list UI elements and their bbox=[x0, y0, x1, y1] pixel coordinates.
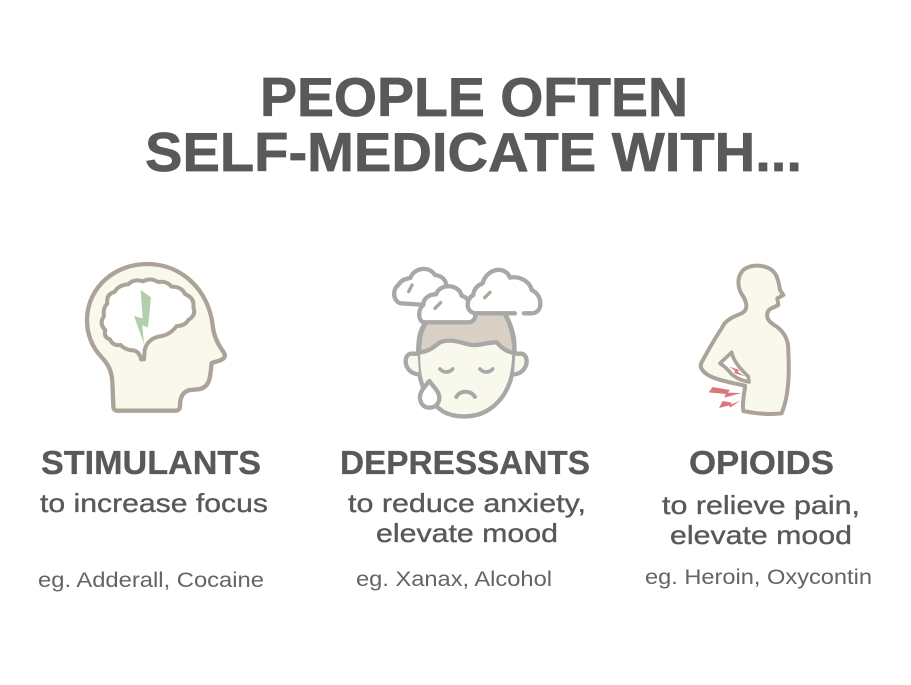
icon: sad face with clouds bbox=[394, 269, 540, 416]
title: SELF-MEDICATE WITH... bbox=[145, 121, 802, 183]
cloud middle bbox=[419, 286, 475, 322]
hair bbox=[419, 312, 515, 353]
depressants text block: DEPRESSANTS bbox=[340, 444, 590, 481]
stimulants text block: to increase focus bbox=[40, 488, 268, 518]
cloud left bbox=[394, 269, 447, 305]
opioids text block bbox=[645, 444, 872, 589]
opioids text block: eg. Heroin, Oxycontin bbox=[645, 565, 872, 589]
stimulants text block bbox=[38, 444, 268, 592]
title: PEOPLE OFTEN bbox=[260, 66, 688, 128]
tear bbox=[420, 381, 439, 408]
pain bolt upper bbox=[709, 387, 742, 398]
stimulants text block: STIMULANTS bbox=[41, 444, 261, 481]
depressants text block bbox=[340, 444, 590, 591]
pain bolt lower bbox=[719, 400, 741, 408]
cloud right bbox=[468, 270, 540, 313]
depressants text block: elevate mood bbox=[376, 518, 558, 548]
opioids text block: to relieve pain, bbox=[662, 490, 860, 520]
frown bbox=[456, 392, 475, 397]
icon: torso with abdominal pain bbox=[701, 266, 789, 414]
title bbox=[145, 66, 802, 183]
depressants text block: eg. Xanax, Alcohol bbox=[356, 567, 552, 591]
brain outline bbox=[102, 279, 194, 359]
icon: head with brain and lightning bbox=[87, 264, 225, 411]
closed eyes bbox=[440, 369, 453, 372]
pain bolt in arm gap bbox=[729, 367, 745, 376]
ears bbox=[406, 354, 419, 374]
face bbox=[418, 312, 514, 416]
stimulants text block: eg. Adderall, Cocaine bbox=[38, 568, 264, 592]
depressants text block: to reduce anxiety, bbox=[348, 488, 586, 518]
opioids text block: OPIOIDS bbox=[689, 444, 834, 481]
icon: lightning bolt bbox=[134, 290, 151, 344]
opioids text block: elevate mood bbox=[670, 520, 852, 550]
arm gap bbox=[720, 352, 749, 382]
